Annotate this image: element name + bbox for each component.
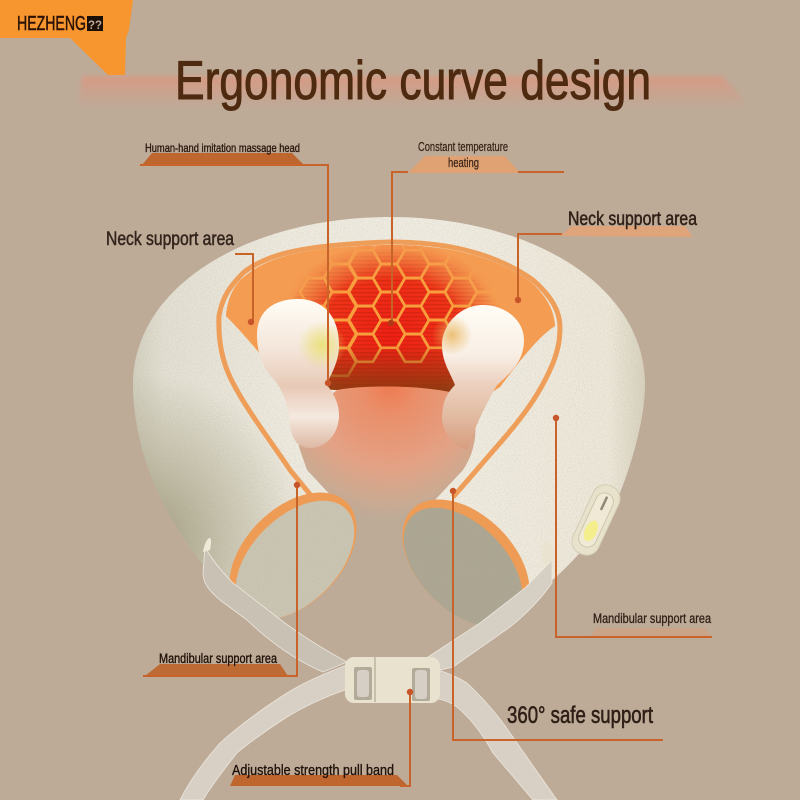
callout: adjustable pull band	[230, 689, 413, 786]
callout leader	[143, 485, 297, 676]
callout text: Mandibular support area	[159, 651, 277, 666]
pillow body	[133, 217, 645, 600]
clasp slot left	[354, 667, 372, 700]
strap: lower right	[432, 668, 557, 800]
button slit	[600, 496, 608, 511]
callout ribbon	[590, 628, 712, 637]
callout text: Neck support area	[568, 209, 697, 230]
control button	[568, 481, 624, 559]
callout dot	[450, 488, 456, 494]
logo missing-glyph boxes: ??	[88, 18, 102, 32]
callout text: heating	[448, 156, 479, 170]
logo text: HEZHENG	[17, 13, 86, 35]
callout leader	[453, 491, 663, 740]
strap loop right	[541, 541, 553, 565]
callout: neck support left	[106, 229, 254, 325]
callout ribbon	[142, 153, 304, 165]
callout leader	[400, 692, 410, 786]
clasp slot right	[412, 668, 430, 701]
logo tag	[0, 0, 133, 75]
right end disc	[378, 475, 554, 651]
pillow lower-left shading	[133, 217, 645, 600]
callout: mandibular support right	[553, 415, 712, 637]
clasp	[345, 657, 440, 703]
callout dot	[407, 689, 413, 695]
callout: neck support right	[515, 209, 697, 303]
honeycomb heat grid	[300, 236, 501, 376]
callout leader	[140, 165, 328, 383]
callout text: Human-hand imitation massage head	[145, 141, 300, 155]
callout dot	[325, 380, 331, 386]
massage head left	[257, 299, 346, 448]
callout leader	[235, 254, 253, 322]
callout ribbon	[560, 226, 693, 237]
callout dot	[388, 320, 394, 326]
title highlight band	[78, 76, 752, 108]
callout dot	[248, 319, 254, 325]
callout text	[418, 140, 508, 170]
callout ribbon	[145, 664, 288, 676]
callout text: Neck support area	[106, 229, 234, 250]
callout dot	[553, 415, 559, 421]
strap and clasp	[180, 538, 557, 800]
left end disc	[205, 468, 381, 644]
strap loop left	[203, 538, 211, 552]
callout: mandibular support left	[143, 482, 300, 676]
callout dot	[294, 482, 300, 488]
callout ribbon	[408, 156, 520, 173]
callout dot	[515, 297, 521, 303]
orange trim	[219, 242, 560, 498]
heated panel	[226, 245, 555, 392]
logo tag shape	[0, 0, 133, 75]
callout leader	[556, 418, 712, 637]
callout text: Constant temperature	[418, 140, 508, 154]
neck pillow	[133, 217, 645, 651]
power light	[581, 518, 601, 543]
callout text: Mandibular support area	[593, 611, 711, 626]
callout: 360 safe support	[450, 488, 663, 740]
strap: upper right	[428, 560, 552, 670]
strap: upper left	[203, 547, 347, 672]
callout text: 360° safe support	[507, 702, 653, 729]
callout text: Adjustable strength pull band	[232, 762, 394, 779]
massage head right	[432, 305, 524, 450]
strap: lower left	[180, 665, 347, 800]
callout leader	[518, 234, 562, 302]
title: Ergonomic curve design	[175, 49, 651, 111]
callout ribbon	[230, 775, 408, 786]
callout: constant temperature heating	[388, 140, 564, 326]
glow inside neck opening	[265, 260, 515, 530]
callout: human-hand massage head	[140, 141, 331, 386]
callout leader	[392, 172, 564, 323]
